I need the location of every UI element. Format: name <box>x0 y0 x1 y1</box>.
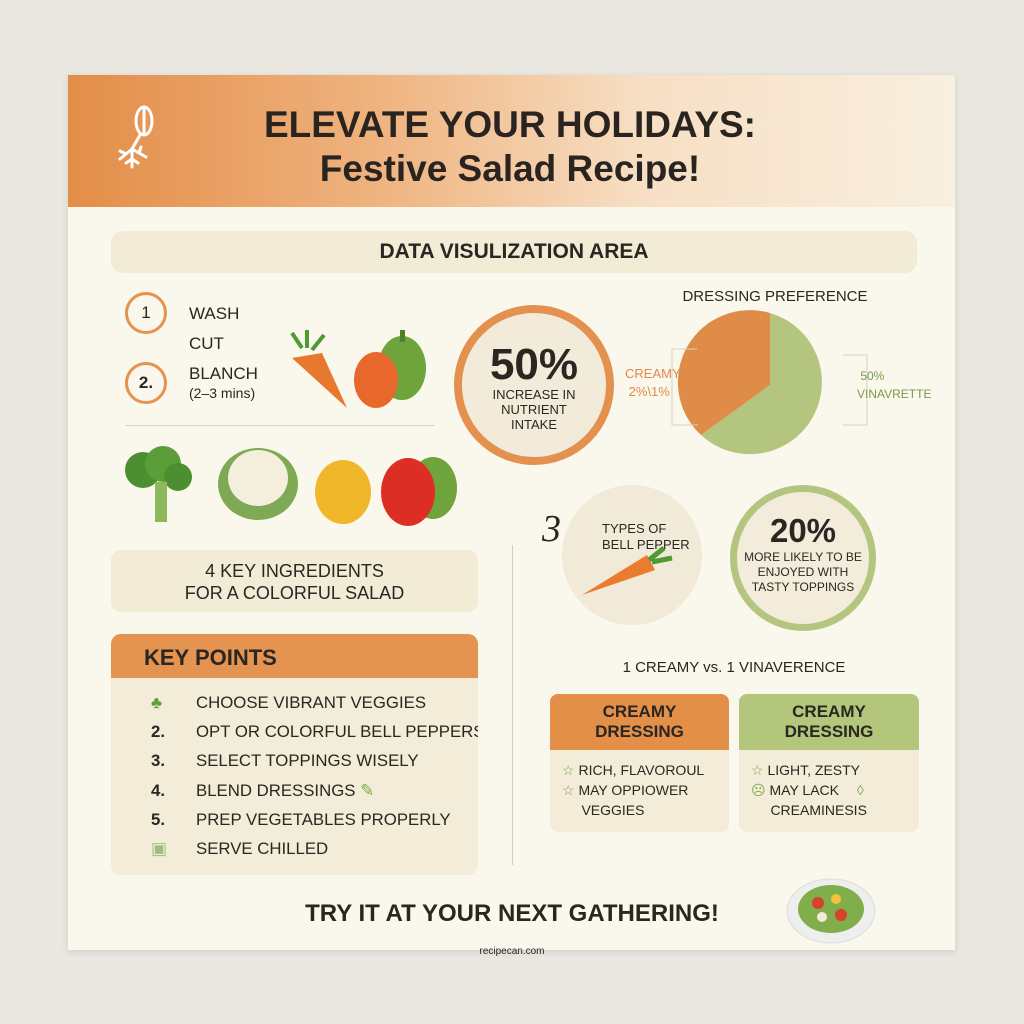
vertical divider <box>512 545 513 865</box>
stat: 20% ring: MORE LIKELY TO BE <box>744 550 862 564</box>
stat: 50% ring: INTAKE <box>511 417 557 432</box>
divider <box>125 425 435 426</box>
key points list: 3. <box>151 751 165 770</box>
steps: WASH <box>189 304 239 323</box>
stat: 50% ring: NUTRIENT <box>501 402 567 417</box>
key points list: SELECT TOPPINGS WISELY <box>196 751 419 770</box>
key points list: 5. <box>151 810 165 829</box>
card: creamy dressing green: DRESSING <box>785 722 873 741</box>
steps <box>125 292 258 404</box>
card: creamy dressing green: ☹ MAY LACK ◊ <box>751 782 864 798</box>
stat: 3 types bell pepper <box>562 485 702 625</box>
key points list: 2. <box>151 722 165 741</box>
stat: 20% ring: ENJOYED WITH <box>758 565 848 579</box>
card: creamy dressing orange <box>550 694 729 832</box>
key points list: BLEND DRESSINGS ✎ <box>196 781 374 800</box>
card: creamy dressing orange: CREAMY <box>603 702 676 721</box>
key points heading: KEY POINTS <box>144 645 277 670</box>
call to action: TRY IT AT YOUR NEXT GATHERING! <box>305 900 719 927</box>
text: 3 <box>542 508 561 550</box>
card: creamy dressing green: ☆ LIGHT, ZESTY <box>751 762 860 778</box>
footer source: recipecan.com <box>479 946 545 957</box>
stat: 20% ring: 20% <box>770 512 836 549</box>
key points list: ♣ <box>151 693 162 712</box>
pie chart: dressing preference: CREAMY <box>625 366 681 381</box>
steps: 2. <box>139 373 153 392</box>
section heading bar: DATA VISULIZATION AREA <box>379 240 649 263</box>
icon: carrot and peppers <box>290 330 426 408</box>
stat: 50% ring: 50% <box>490 340 578 389</box>
steps: CUT <box>189 334 224 353</box>
stat: 20% ring: TASTY TOPPINGS <box>752 580 854 594</box>
pie chart: dressing preference: VINAVRETTE <box>857 387 931 401</box>
steps: (2–3 mins) <box>189 385 255 401</box>
key points list: ▣ <box>151 839 167 858</box>
title: Festive Salad Recipe! <box>320 148 700 189</box>
icons: vegetables row <box>125 446 457 526</box>
key points heading <box>111 634 478 678</box>
key points list: 4. <box>151 781 165 800</box>
key points list: SERVE CHILLED <box>196 839 328 858</box>
icon: salad bowl <box>786 878 876 944</box>
ingredients box: FOR A COLORFUL SALAD <box>185 583 404 603</box>
section heading bar <box>111 231 917 273</box>
stat: 20% ring <box>730 485 876 631</box>
key points list: CHOOSE VIBRANT VEGGIES <box>196 693 426 712</box>
card: creamy dressing orange: DRESSING <box>595 722 684 741</box>
header band <box>68 75 955 207</box>
pie chart: dressing preference: 50% <box>860 369 884 383</box>
title <box>264 104 756 189</box>
key points list: PREP VEGETABLES PROPERLY <box>196 810 451 829</box>
stat: 3 types bell pepper: BELL PEPPER <box>602 537 690 552</box>
key points list: OPT OR COLORFUL BELL PEPPERS <box>196 722 478 741</box>
card: creamy dressing green <box>739 694 919 832</box>
card: creamy dressing orange: ☆ RICH, FLAVOROUL <box>562 762 704 778</box>
key points list <box>151 693 478 858</box>
title: ELEVATE YOUR HOLIDAYS: <box>264 104 756 145</box>
steps: BLANCH <box>189 364 258 383</box>
pie chart: dressing preference <box>625 288 931 454</box>
key points panel <box>111 634 478 875</box>
card: creamy dressing green: CREAMY <box>792 702 866 721</box>
stat: 3 types bell pepper: TYPES OF <box>602 521 666 536</box>
card: creamy dressing orange: ☆ MAY OPPIOWER <box>562 782 688 798</box>
pie chart: dressing preference: 2%\1% <box>629 384 670 399</box>
steps: 1 <box>141 303 151 322</box>
comparison subtitle: 1 CREAMY vs. 1 VINAVERENCE <box>623 659 845 676</box>
stat: 50% ring: INCREASE IN <box>492 387 576 402</box>
card <box>68 75 955 950</box>
card: creamy dressing green: CREAMINESIS <box>770 802 867 818</box>
stat: 50% ring <box>454 305 614 465</box>
ingredients box: 4 KEY INGREDIENTS <box>205 561 384 581</box>
pie chart: dressing preference: DRESSING PREFERENCE <box>682 288 868 305</box>
card: creamy dressing orange: VEGGIES <box>581 802 644 818</box>
ingredients box <box>111 550 478 612</box>
icon: whisk snowflake <box>118 106 154 168</box>
